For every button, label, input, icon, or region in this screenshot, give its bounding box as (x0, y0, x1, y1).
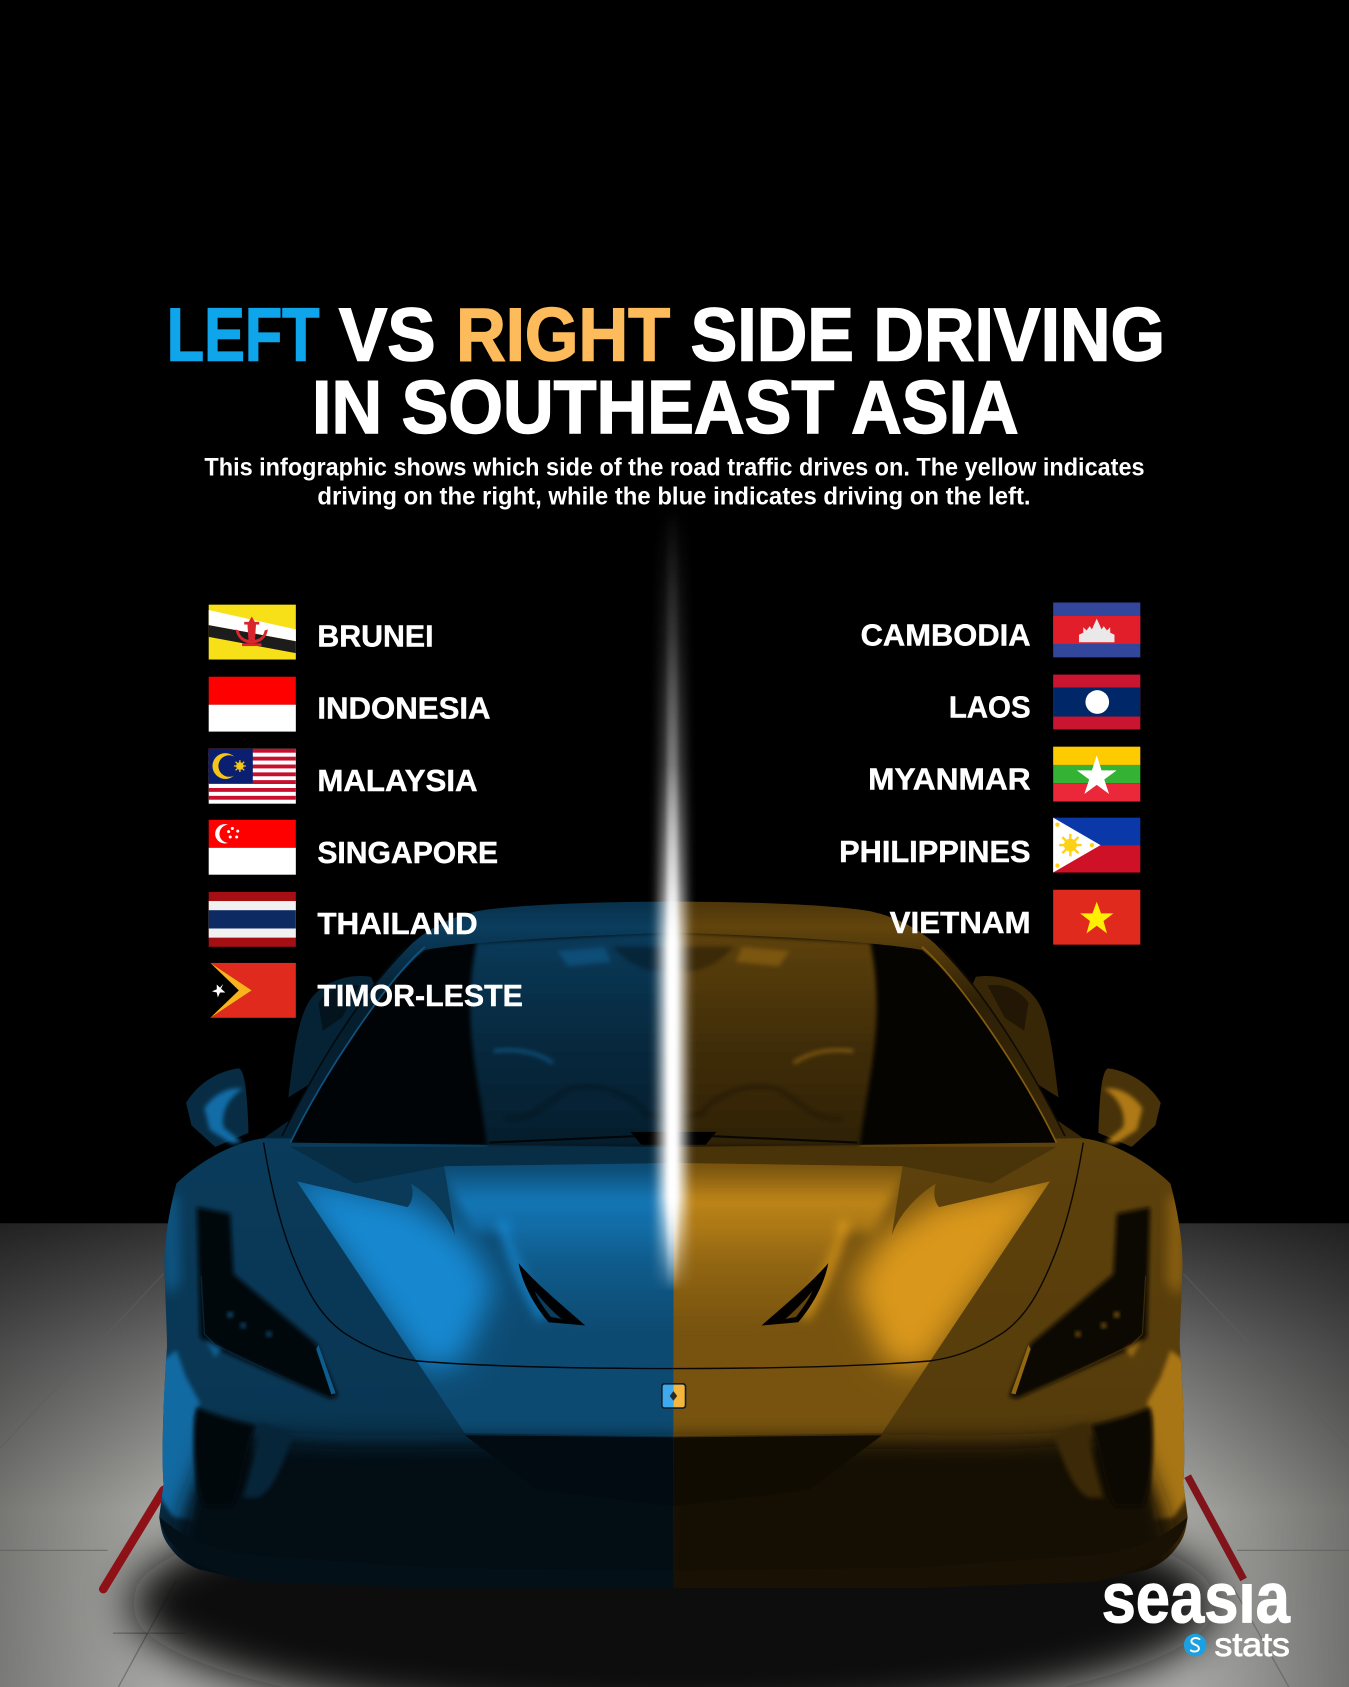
left-driving list (209, 605, 523, 1018)
label: Laos: LAOS (949, 692, 1031, 725)
title: IN SOUTHEAST ASIA (312, 365, 1019, 449)
label: Singapore: SINGAPORE (317, 837, 498, 870)
label: Myanmar: MYANMAR (868, 764, 1031, 797)
flag: Cambodia (1053, 602, 1140, 657)
title: VS (339, 292, 436, 376)
label: Timor-Leste: TIMOR-LESTE (317, 980, 523, 1013)
flag: Singapore (209, 820, 296, 875)
car: yellow right half (658, 902, 1190, 1603)
flag: Myanmar (1053, 747, 1140, 802)
title: RIGHT (456, 292, 670, 376)
parking line: left (103, 1490, 164, 1589)
label: Indonesia: INDONESIA (317, 693, 491, 726)
label: Philippines: PHILIPPINES (839, 836, 1031, 869)
flag: Vietnam (1053, 890, 1140, 945)
logo subword: stats (1215, 1627, 1290, 1664)
title (167, 292, 1165, 449)
car shadow on floor (130, 1483, 1217, 1687)
logo: seasia stats (1103, 1583, 1291, 1657)
flag: Laos (1053, 675, 1140, 729)
label: Cambodia: CAMBODIA (861, 620, 1031, 653)
right-driving list (839, 602, 1140, 945)
flag: Timor-Leste (209, 963, 296, 1018)
parking line: right (1188, 1476, 1244, 1579)
floor (0, 1223, 1349, 1687)
subtitle: driving on the right, while the blue indicates driving on the left. (317, 484, 1031, 511)
subtitle (204, 455, 1145, 511)
label: Brunei: BRUNEI (317, 621, 434, 654)
title: SIDE DRIVING (691, 292, 1165, 376)
subtitle: This infographic shows which side of the road traffic drives on. The yellow indicates (204, 455, 1145, 482)
flag: Malaysia (209, 749, 296, 804)
flag: Thailand (209, 892, 296, 947)
car badge (661, 1383, 686, 1409)
label: Thailand: THAILAND (317, 908, 478, 941)
flag: Indonesia (209, 677, 296, 732)
light beam divider (659, 506, 685, 1291)
logo icon (1184, 1634, 1206, 1656)
logo wordmark: seasia (1102, 1559, 1290, 1638)
label: Malaysia: MALAYSIA (317, 765, 478, 798)
flag: Philippines (1053, 818, 1140, 873)
title: LEFT (167, 292, 319, 376)
flag: Brunei (209, 605, 296, 660)
car: blue left half (157, 902, 688, 1603)
label: Vietnam: VIETNAM (890, 907, 1031, 940)
